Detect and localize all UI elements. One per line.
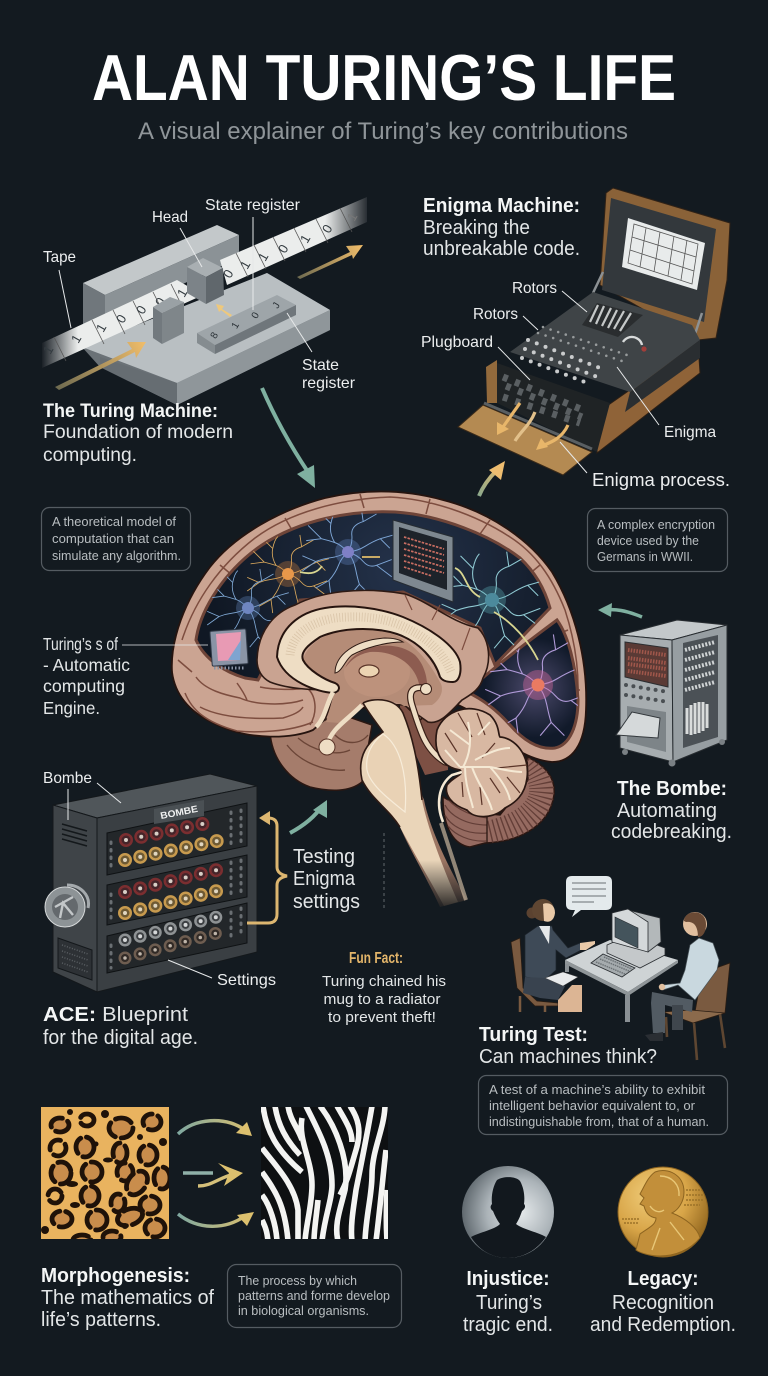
labels: Enigma parts: Enigma	[664, 424, 716, 441]
text: ACE	[43, 1004, 198, 1049]
fun fact: mug to a radiator	[324, 991, 440, 1008]
text: Testing Enigma settings: Testing	[293, 846, 355, 868]
vents	[62, 824, 87, 846]
dark neural field front	[196, 512, 550, 680]
fun fact	[322, 950, 446, 1026]
illustration: Turing machine: 1	[40, 343, 56, 357]
illustration: Turing machine: 0	[220, 267, 236, 281]
nameplate	[154, 800, 204, 824]
title: ALAN TURING’S LIFE	[92, 41, 676, 114]
text: Enigma Machine: Enigma Machine:	[423, 195, 580, 217]
illustration: brain	[172, 492, 591, 907]
knob	[45, 885, 88, 927]
state register bar	[197, 295, 296, 354]
callout: Enigma	[588, 508, 728, 572]
computer	[591, 909, 665, 977]
text: The Bombe: The Bombe:	[617, 778, 727, 800]
callout: Turing test: A test of a machine’s ability to exhibit	[489, 1083, 706, 1097]
flap	[458, 403, 592, 475]
callout: Enigma: Germans in WWII.	[597, 550, 693, 564]
text: Injustice: Injustice:	[466, 1268, 550, 1290]
callout: Turing test: intelligent behavior equivalent to, or	[489, 1099, 695, 1113]
callout: Turing test	[478, 1076, 728, 1134]
bracket: testing settings	[247, 811, 287, 923]
panels	[107, 803, 247, 973]
arrow: tape in	[55, 342, 146, 390]
text: Injustice	[463, 1268, 553, 1336]
plugboard	[495, 363, 610, 452]
text: Legacy: Recognition	[612, 1292, 714, 1314]
callout: Morphogenesis: The process by which	[238, 1274, 357, 1288]
midbrain region	[303, 628, 442, 723]
fornix strip	[410, 684, 465, 767]
text: ACE: ACE: Blueprint	[43, 1004, 188, 1026]
text: Turing Test: Can machines think?	[479, 1046, 657, 1068]
illustration: Turing machine: 1	[68, 332, 84, 346]
table	[565, 940, 678, 1022]
text: Testing Enigma settings	[293, 846, 360, 913]
arrow: brain to Enigma	[479, 461, 505, 496]
callout: Turing machine: computation that can	[52, 532, 174, 546]
labels: Turing machine parts: Tape	[43, 249, 76, 266]
callout: Enigma: device used by the	[597, 534, 699, 548]
callout: Morphogenesis: in biological organisms.	[238, 1304, 369, 1318]
head block	[187, 258, 224, 304]
icon: silhouette	[462, 1166, 554, 1258]
text: The Turing Machine: The Turing Machine:	[43, 400, 218, 422]
text: The Bombe: codebreaking.	[611, 821, 732, 843]
inner tissue	[257, 590, 489, 722]
text: The Bombe: Automating	[617, 800, 717, 822]
text: Turing Test	[479, 1024, 657, 1068]
chip	[210, 629, 248, 668]
text: ACE: for the digital age.	[43, 1027, 198, 1049]
subtitle: A visual explainer of Turing’s key contributions	[138, 118, 628, 145]
temporal lobe	[270, 700, 372, 790]
state register bar: 0	[250, 310, 262, 321]
fornix arch	[335, 638, 427, 690]
lid	[593, 188, 730, 340]
text: Turing Test: Turing Test:	[479, 1024, 588, 1046]
dark neural field rear	[467, 620, 578, 748]
illustration: Turing machine: 1	[237, 258, 253, 272]
text: Legacy: Legacy:	[628, 1268, 698, 1290]
callout: Turing machine: A theoretical model of	[52, 515, 177, 529]
cerebrum	[172, 492, 586, 762]
keys	[522, 327, 633, 384]
state register bar: 8	[209, 330, 221, 341]
labels: Enigma parts: Enigma process.	[592, 469, 730, 490]
illustration: Turing machine: 0	[113, 312, 129, 326]
labels: Turing machine parts: State register	[205, 197, 301, 214]
neuron: teal	[442, 552, 542, 648]
text: Injustice: tragic end.	[463, 1314, 553, 1336]
text: Testing Enigma settings: Enigma	[293, 868, 356, 890]
label: Automatic computing engine: - Automatic	[43, 655, 130, 675]
labels: Bombe parts: Settings	[217, 972, 276, 989]
arrow: tape out	[297, 245, 363, 279]
screen module	[393, 520, 453, 602]
labels: Turing machine parts	[43, 197, 356, 392]
indicator columns	[111, 810, 241, 968]
labels: Enigma parts: Rotors	[473, 306, 518, 323]
arrow: Turing machine to brain	[262, 388, 315, 488]
neuron: pink	[485, 634, 578, 736]
labels: Enigma parts	[421, 280, 730, 490]
illustration: Turing machine: 1	[174, 286, 190, 300]
rotors	[582, 303, 643, 337]
text: The Turing Machine: Foundation of modern	[43, 421, 233, 443]
labels: Enigma parts: Plugboard	[421, 334, 493, 351]
neuron: orange	[247, 535, 329, 613]
illustration: Bombe cabinet	[616, 620, 727, 766]
text: Injustice: Turing’s	[476, 1292, 542, 1314]
text: Morphogenesis: The mathematics of	[41, 1286, 214, 1309]
text: The Turing Machine	[43, 400, 233, 466]
arrow: Bombe to brain input	[598, 603, 642, 617]
text: Testing Enigma settings: settings	[293, 891, 360, 913]
speaker grille	[58, 938, 92, 980]
text: Enigma Machine: Breaking the	[423, 217, 530, 239]
pituitary stalk	[316, 692, 362, 755]
signal arrows	[300, 557, 538, 660]
illustration: zebra pattern	[261, 1106, 388, 1241]
callout: Turing machine	[42, 508, 190, 570]
text: The Bombe	[611, 778, 732, 843]
carriage block	[153, 297, 184, 344]
rotor drums	[111, 810, 241, 968]
brainstem	[361, 700, 467, 907]
neuron: pale blue	[207, 569, 289, 647]
cerebellum ring	[443, 757, 554, 847]
labels: Bombe parts: Bombe	[43, 770, 92, 787]
illustration: Turing machine: 1	[344, 210, 360, 224]
illustration: Turing machine: 1	[255, 250, 271, 264]
state register bar: 1	[230, 320, 242, 331]
central dark tissue	[400, 680, 450, 775]
text: Morphogenesis	[41, 1264, 214, 1331]
labels: Enigma parts: Rotors	[512, 280, 557, 297]
text: Legacy: and Redemption.	[590, 1314, 736, 1336]
fun fact: to prevent theft!	[328, 1009, 436, 1026]
text: Morphogenesis: life’s patterns.	[41, 1308, 161, 1331]
illustration: Bombe machine: BOMBE	[159, 804, 199, 822]
label: Automatic computing engine: Engine.	[43, 698, 100, 718]
label: Automatic computing engine	[43, 634, 208, 718]
arrow: Bombe to brain	[290, 800, 327, 833]
text: The Turing Machine: computing.	[43, 444, 137, 466]
arrows: signal	[503, 403, 568, 446]
text: Enigma Machine	[423, 195, 580, 260]
callout: Enigma: A complex encryption	[597, 518, 715, 532]
label: Automatic computing engine: computing	[43, 676, 125, 696]
corpus callosum	[277, 606, 461, 693]
callout: Morphogenesis	[228, 1264, 402, 1328]
text: Morphogenesis: Morphogenesis:	[41, 1264, 190, 1287]
illustration: Turing machine: 1	[297, 232, 313, 246]
text: Legacy	[590, 1268, 736, 1336]
fun fact: Fun Fact:	[349, 950, 403, 967]
labels: Turing machine parts: State	[302, 357, 339, 374]
illustration: Turing machine: 0	[319, 222, 335, 236]
callout: Turing machine: simulate any algorithm.	[52, 549, 181, 563]
icon: gold medal	[618, 1167, 708, 1257]
illustration: Turing machine: 0	[152, 295, 168, 309]
illustration: Turing machine: 0	[275, 242, 291, 256]
cortex folds	[178, 494, 580, 732]
label: Automatic computing engine: Turing’s s of	[43, 634, 118, 654]
illustration: Turing test scene	[511, 876, 730, 1060]
state register bar: J	[271, 301, 283, 311]
illustration: Bombe machine	[45, 774, 257, 992]
dial	[623, 337, 642, 345]
illustration: leopard pattern	[41, 1107, 170, 1245]
callout: Turing test: indistinguishable from, that of a human.	[489, 1115, 709, 1129]
illustration: Enigma machine	[458, 188, 730, 475]
labels: Turing machine parts: register	[302, 375, 356, 392]
neurons	[207, 508, 591, 736]
text: Enigma Machine: unbreakable code.	[423, 238, 580, 260]
fun fact: Turing chained his	[322, 973, 446, 990]
illustration: Turing machine	[40, 197, 367, 405]
thalamus oval	[359, 665, 379, 677]
illustration: Turing machine: 1	[93, 321, 109, 335]
callout: Morphogenesis: patterns and forme develop	[238, 1289, 390, 1303]
labels: Bombe parts	[43, 770, 276, 989]
neuron: blue violet	[302, 508, 394, 596]
labels: Turing machine parts: Head	[152, 209, 188, 226]
arrow: head step	[216, 304, 232, 317]
woman	[511, 899, 595, 1012]
man	[645, 912, 730, 1060]
illustration: Turing machine: 0	[133, 303, 149, 317]
arrows: morphogenesis	[178, 1121, 254, 1226]
speech bubble	[566, 876, 612, 917]
cerebellum arbor	[436, 709, 527, 822]
